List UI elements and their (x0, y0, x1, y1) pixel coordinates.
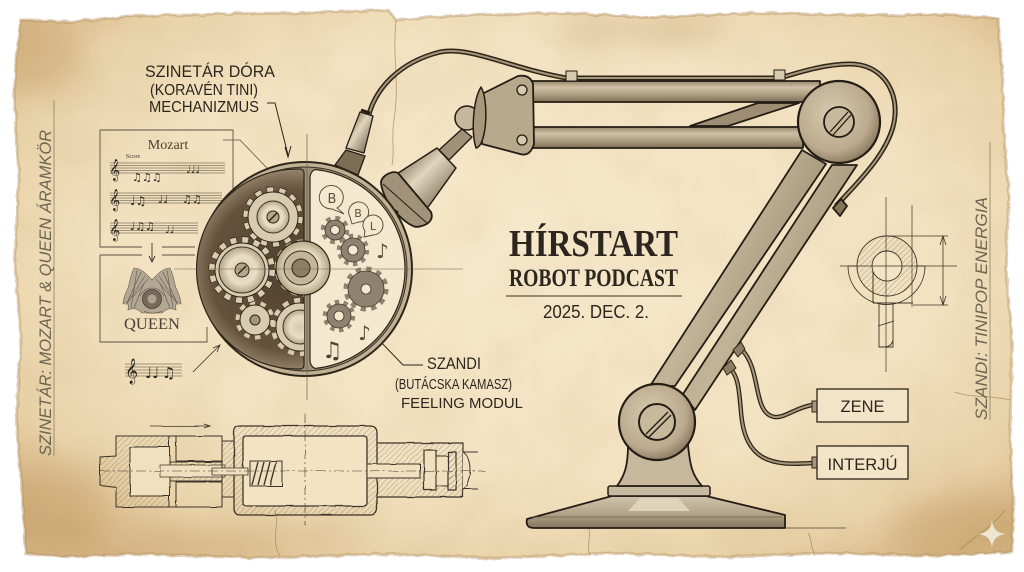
output box: ZENE: ZENE (840, 397, 884, 416)
panel: Mozart score: Mozart (148, 138, 188, 153)
robot arm (335, 70, 880, 528)
bracket (439, 76, 534, 160)
gear: centre (274, 240, 304, 296)
label: Szandi: (BUTÁCSKA KAMASZ) (395, 376, 512, 393)
icon: sparkle mark (978, 520, 1006, 548)
gear: top (246, 190, 300, 244)
notes: ♩♫♫ (130, 220, 155, 233)
panel: Szinetár mechanical half (196, 168, 305, 370)
notes: ♫♫♫ (132, 171, 162, 184)
technical drawing: ring section (840, 197, 957, 372)
horizontal bars (528, 70, 820, 148)
mic cable (368, 51, 895, 206)
notes: ♩♫ (130, 194, 146, 208)
title block: 2025. DEC. 2. (543, 302, 649, 322)
staff lines (110, 163, 225, 233)
panel: Szandi feeling half: B (328, 192, 336, 207)
label: Szinetár Dóra: MECHANIZMUS (149, 99, 259, 116)
panel: Queen logo (100, 255, 207, 342)
panel: Mozart score (100, 130, 267, 247)
output box: ZENE (812, 389, 908, 422)
music motif: ♫ (162, 364, 175, 382)
notes: 𝄞 (109, 159, 120, 182)
music motif (125, 358, 182, 384)
central hub (276, 241, 330, 295)
panel: Queen logo: QUEEN (124, 316, 180, 333)
music notes (322, 239, 389, 364)
notes (109, 159, 202, 242)
side note: Szinetár circuit: SZINETÁR: MOZART & QUEEN ÁRAMKÖR (36, 130, 55, 456)
lower joint (619, 384, 695, 460)
music notes: ♪ (358, 321, 371, 345)
label: Szandi: FEELING MODUL (401, 395, 523, 412)
device: split gear head (174, 134, 463, 400)
panel: Mozart score: Score (126, 153, 141, 160)
music motif: 𝄞 (125, 358, 138, 384)
notes: ♫♫ (182, 193, 202, 206)
notes: ♩♩♩ (186, 165, 200, 176)
panel: Szandi feeling half: B (354, 207, 362, 220)
output box: INTERJÚ (812, 446, 908, 479)
side note: Szandi energy: SZANDI: TINIPOP ENERGIA (972, 197, 991, 420)
gear: large left (212, 240, 272, 300)
notes: 𝄞 (109, 189, 120, 212)
notes: ♩♩ (165, 225, 174, 236)
music notes: ♪ (376, 239, 389, 263)
title block (506, 223, 682, 322)
small gears (323, 218, 386, 330)
connector (335, 110, 373, 175)
title block: ROBOT PODCAST (509, 265, 678, 292)
speech bubbles (319, 185, 383, 237)
top joint (798, 81, 880, 163)
label: Szandi (375, 336, 523, 412)
notes: 𝄞 (109, 219, 120, 242)
title block: HÍRSTART (509, 223, 678, 265)
gear: small (238, 303, 272, 337)
diagonal struts (650, 150, 857, 410)
label: Szinetár Dóra: (KORAVÉN TINI) (150, 82, 258, 99)
panel: Szandi feeling half (310, 170, 405, 368)
pedestal base (527, 445, 846, 528)
label: Szinetár Dóra: SZINETÁR DÓRA (145, 62, 276, 81)
gear: bottom (271, 298, 304, 356)
arrow: Mozart to Queen (149, 243, 155, 262)
output box: INTERJÚ: INTERJÚ (828, 455, 898, 474)
mechanical cross-section drawing (100, 413, 485, 525)
icon: Queen crest (123, 268, 181, 313)
microphone head (378, 148, 456, 227)
music notes: ♫ (322, 338, 343, 364)
music motif: ♩♩ (145, 364, 159, 382)
output cables (723, 342, 812, 464)
panel: Szandi feeling half: L (370, 220, 377, 233)
label: Szandi: SZANDI (427, 355, 481, 373)
arrow: music to gears (193, 345, 220, 372)
notes: ♩♩ (158, 193, 168, 206)
label: Szinetár Dóra (145, 62, 291, 157)
